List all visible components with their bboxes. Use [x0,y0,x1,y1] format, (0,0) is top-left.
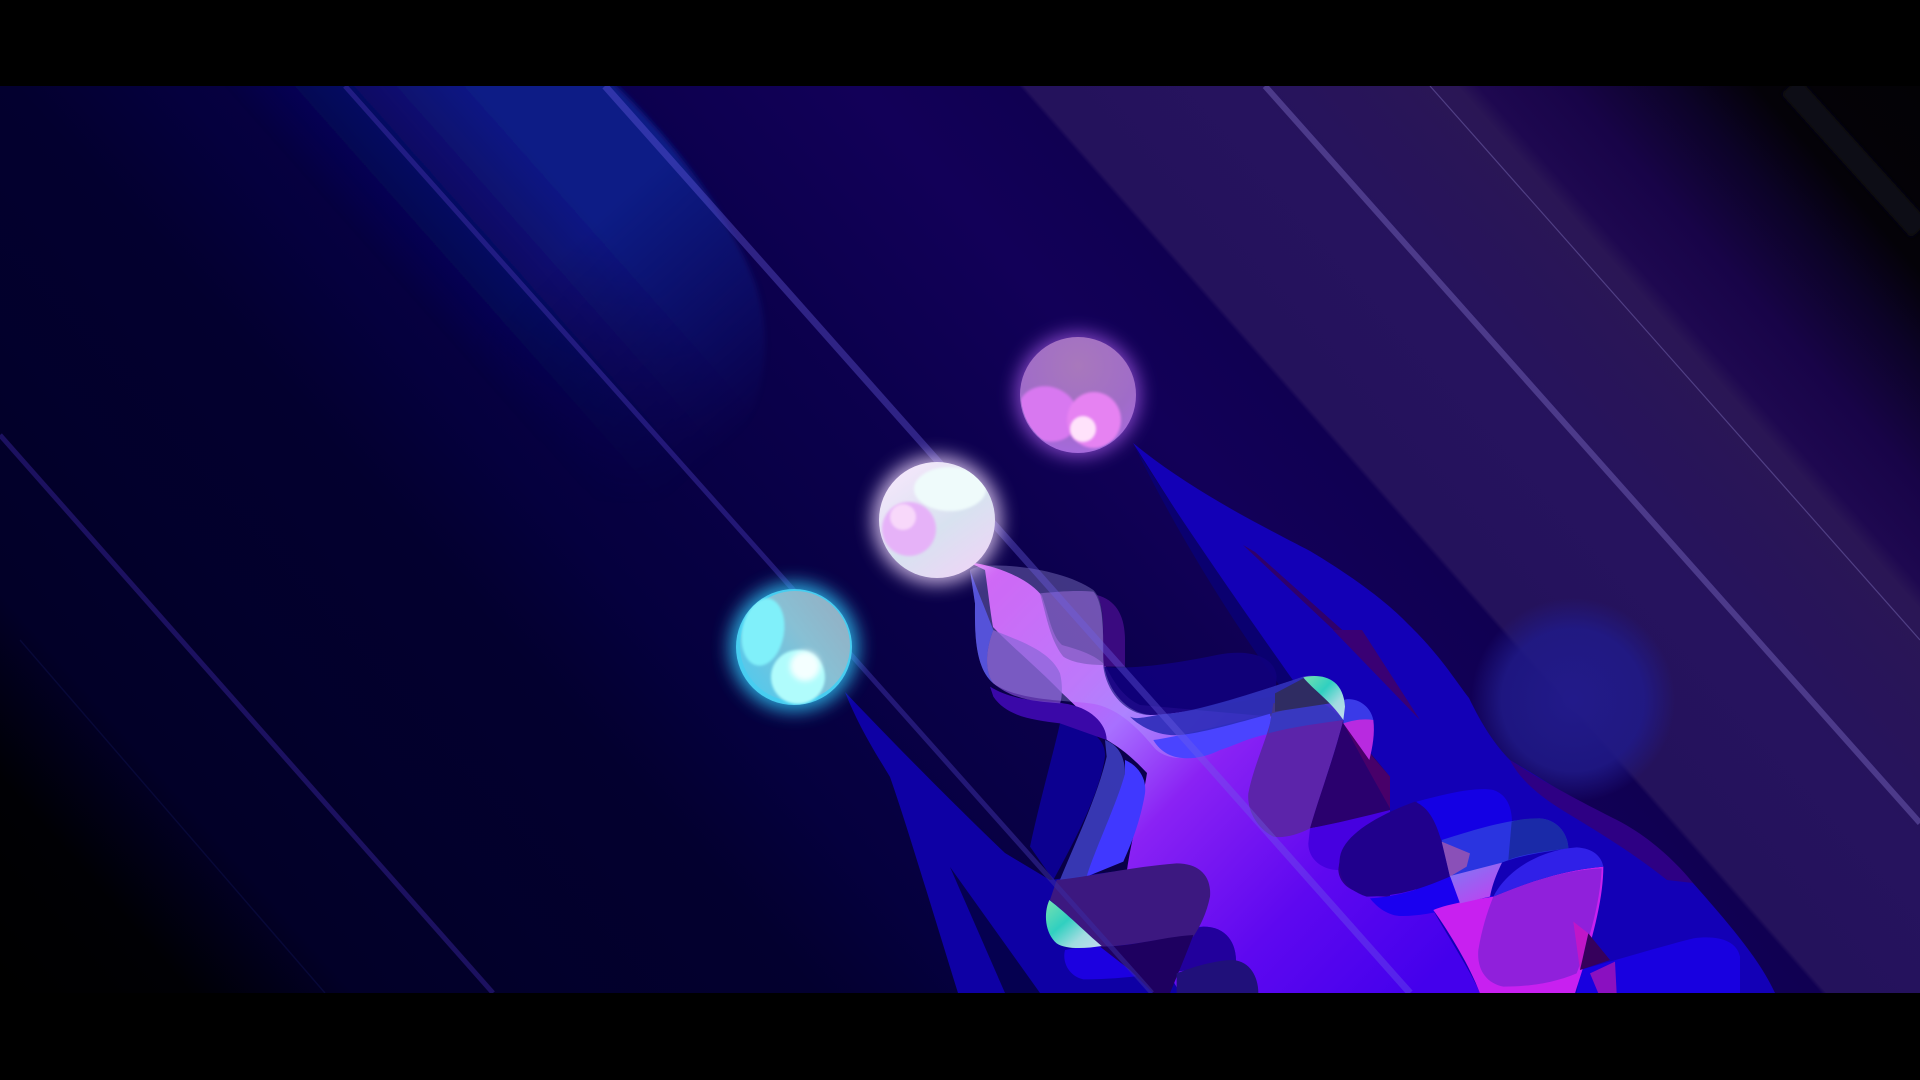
blue cap [1343,699,1373,723]
magenta triangle [1343,718,1374,760]
teal tip top [1303,676,1345,720]
dark purple wave under lavender [990,687,1107,740]
pink spire [1433,867,1603,993]
purple overlay top [1040,591,1103,665]
dark purple block lower left [1050,863,1210,947]
navy wave [1103,653,1277,715]
flame from purple orb [1133,443,1775,993]
dark block right [1310,720,1390,828]
teal tip lower [1046,900,1102,948]
maroon spike [1580,933,1610,970]
dark wave bottom [1177,960,1258,993]
bright blue band left edge [970,570,993,683]
blue glow blob upper left [260,86,764,421]
line: through white orb [605,86,1410,993]
ribbon waves lower right group [1339,789,1740,993]
dark segment of grey wave [1508,818,1568,860]
orb: purple [1008,333,1140,457]
purple wave right [1308,810,1390,870]
blue band under block [1370,877,1493,916]
dark wave block [1339,802,1450,897]
flame streak lower left [950,867,1040,993]
blue vertical band [1087,760,1145,877]
bright blue wave top [1417,789,1512,840]
purple stem under grey wave [1442,842,1470,877]
dark wave right [1338,862,1390,897]
dark purple block left [1248,717,1343,837]
dark block at tip [1275,678,1330,712]
blue glow blob lower right [1477,605,1668,796]
magenta ridge on flame [1510,760,1693,883]
grey blue wave [1442,818,1568,877]
orb: cyan [730,583,858,711]
line: upper right thin [1430,86,1920,640]
flame shard [1333,630,1420,720]
line: through cyan orb [345,86,1152,993]
flame streak thin [1243,545,1342,630]
lighter stem [1450,863,1502,903]
ribbon waves upper group [970,565,1390,993]
flame from cyan orb [845,692,1200,993]
dark purple cap top [1097,595,1125,667]
block top blue band [1268,702,1343,733]
lavender wave [970,565,1345,758]
line: far top right streak [1790,86,1920,230]
orb: white [873,456,1001,584]
line: upper right bright [1265,86,1920,823]
lavender vertical band [1060,740,1125,880]
bottom right blue wave [1577,937,1740,993]
maroon triangle [1343,723,1390,808]
navy region left of band [1030,723,1105,880]
dark spike below block [1100,935,1193,993]
dark blue segment of lower wave [1177,927,1236,972]
faint line lower left [20,640,325,993]
blue wave lower [1493,847,1603,897]
grey blue wave [1130,677,1317,735]
line: lower left [0,435,493,993]
main purple core [968,562,1480,993]
pink sliver [1573,922,1588,970]
purple sliver bottom [1590,962,1617,993]
bright blue wave [1153,713,1273,758]
purple overlay on spire [1478,868,1602,987]
dark ribbon edge on purple flame [1133,443,1300,690]
purple overlay left [987,630,1062,703]
blue wave lower left [1064,927,1236,979]
